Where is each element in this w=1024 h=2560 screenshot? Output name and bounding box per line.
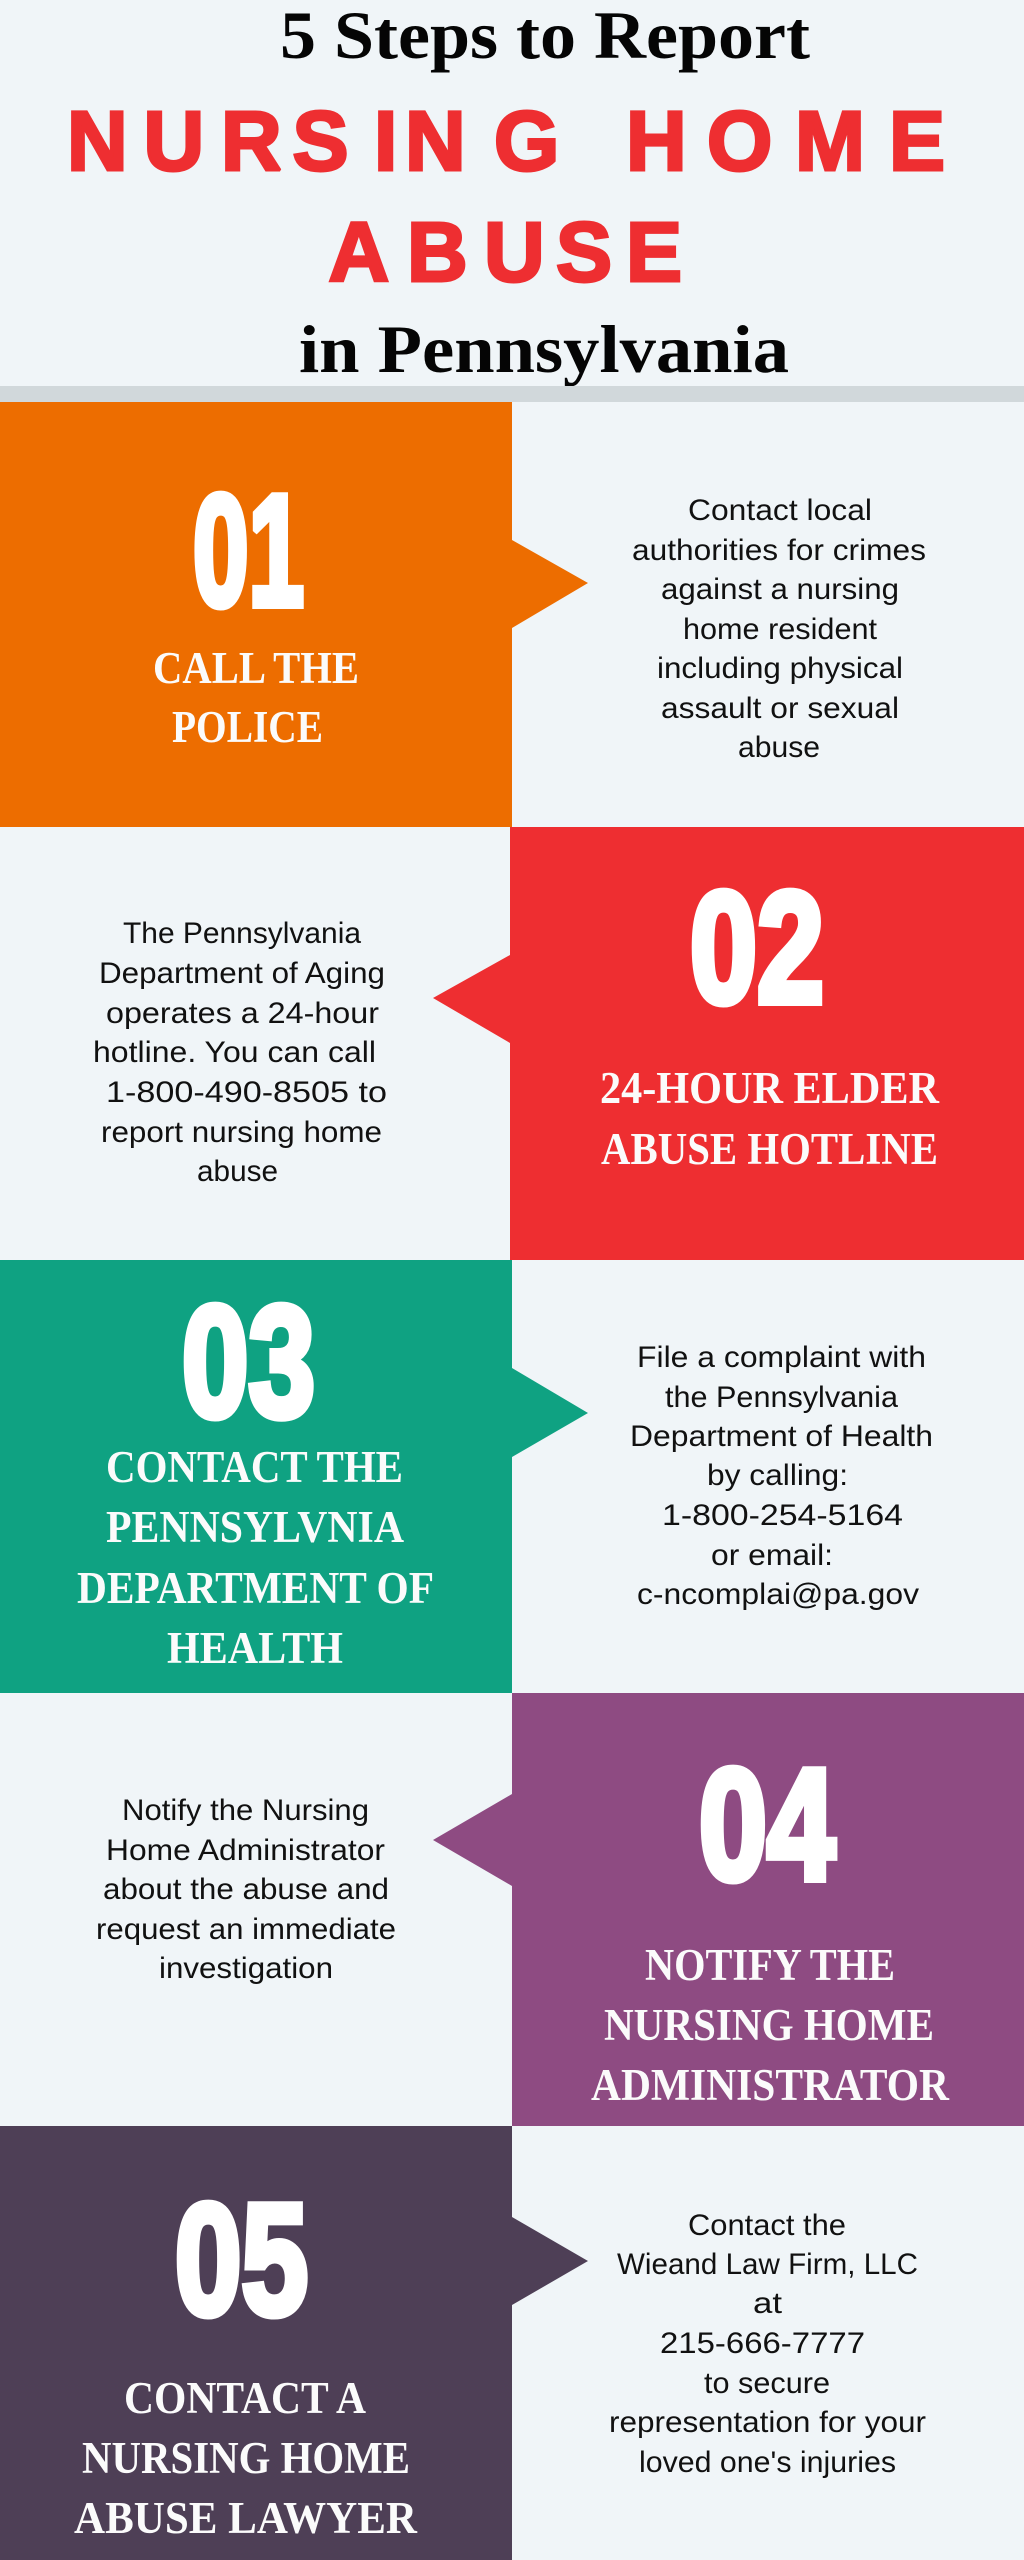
text: step 2 description [93, 917, 387, 1188]
number 04: 04 [699, 1737, 835, 1913]
panel: step 1 call the police [0, 402, 926, 827]
heading: notify the nursing home administrator [591, 1940, 949, 2110]
text: step 3 description: the Pennsylvania [665, 1381, 898, 1414]
text: step 4 description: Home Administrator [106, 1834, 385, 1867]
text: step 2 description: abuse [197, 1155, 278, 1188]
heading: contact the pennsylvania department of health: DEPARTMENT OF [77, 1563, 434, 1613]
heading: contact the pennsylvania department of health: HEALTH [167, 1623, 343, 1673]
text: step 4 description: investigation [159, 1952, 333, 1985]
panel: step 3 department of health [0, 1260, 933, 1693]
heading: contact the pennsylvania department of health [77, 1442, 434, 1673]
panel: step 4 administrator [96, 1693, 1024, 2126]
text: step 5 description: at [753, 2287, 783, 2320]
panel shape with arrow: step 5 [0, 2126, 588, 2560]
text: step 2 description: operates a 24-hour [106, 997, 379, 1030]
heading: notify the nursing home administrator: NURSING HOME [604, 2000, 934, 2050]
text: step 5 description: representation for your [609, 2406, 926, 2439]
panel shape with arrow: step 4 [433, 1693, 1024, 2126]
heading: contact a nursing home abuse lawyer: CONTACT A [124, 2373, 366, 2423]
heading: call the police: CALL THE [153, 643, 359, 693]
heading: 24-hour elder abuse hotline: ABUSE HOTLINE [601, 1124, 938, 1174]
title: NURSING HOME [67, 94, 945, 188]
heading: 24-hour elder abuse hotline: 24-HOUR ELDER [600, 1063, 939, 1113]
text: step 4 description: about the abuse and [103, 1873, 389, 1906]
text: step 2 description: Department of Aging [99, 957, 385, 990]
title: ABUSE [328, 205, 682, 299]
panel: step 2 hotline [93, 827, 1024, 1260]
heading: contact a nursing home abuse lawyer [74, 2373, 417, 2543]
heading: contact the pennsylvania department of health: PENNSYLVNIA [106, 1502, 404, 1552]
panel shape with arrow: step 3 [0, 1260, 588, 1693]
number 01: 01 [193, 463, 304, 639]
heading: contact the pennsylvania department of health: CONTACT THE [106, 1442, 403, 1492]
text: step 5 description: loved one's injuries [639, 2446, 896, 2479]
text: step 2 description: 1-800-490-8505 to [106, 1076, 387, 1109]
heading: notify the nursing home administrator: NOTIFY THE [645, 1940, 895, 1990]
text: step 5 description [609, 2209, 926, 2479]
text: step 3 description [630, 1341, 933, 1611]
heading: contact a nursing home abuse lawyer: NURSING HOME [82, 2433, 410, 2483]
title [67, 0, 945, 387]
text: step 3 description: or email: [711, 1539, 833, 1572]
heading: contact a nursing home abuse lawyer: ABUSE LAWYER [74, 2493, 417, 2543]
text: step 5 description: Wieand Law Firm, LLC [617, 2248, 918, 2281]
text: step 5 description: to secure [704, 2367, 830, 2400]
panel: step 5 lawyer [0, 2126, 926, 2560]
text: step 1 description: home resident [683, 613, 878, 646]
text: step 5 description: Contact the [688, 2209, 846, 2242]
text: step 3 description: by calling: [707, 1459, 848, 1492]
text: step 3 description: c-ncomplai@pa.gov [637, 1578, 919, 1611]
number 05: 05 [175, 2172, 308, 2348]
heading: call the police [153, 643, 359, 752]
text: step 2 description: report nursing home [101, 1116, 382, 1149]
text: step 3 description: Department of Health [630, 1420, 933, 1453]
title: in Pennsylvania [299, 311, 789, 387]
text: step 5 description: 215-666-7777 [660, 2327, 865, 2360]
heading: call the police: POLICE [172, 702, 323, 752]
number 02: 02 [690, 860, 824, 1036]
text: step 1 description [632, 494, 926, 764]
panel shape with arrow: step 1 [0, 402, 588, 827]
panel shape with arrow: step 2 [433, 827, 1024, 1260]
text: step 1 description: including physical [657, 652, 903, 685]
text: step 4 description: request an immediate [96, 1913, 396, 1946]
text: step 1 description: Contact local [688, 494, 872, 527]
text: step 1 description: against a nursing [661, 573, 899, 606]
heading: 24-hour elder abuse hotline [600, 1063, 939, 1174]
text: step 1 description: authorities for crimes [632, 534, 926, 567]
text: step 1 description: abuse [738, 731, 820, 764]
text: step 3 description: 1-800-254-5164 [662, 1499, 903, 1532]
text: step 4 description: Notify the Nursing [122, 1794, 369, 1827]
text: step 2 description: hotline. You can call [93, 1036, 376, 1069]
text: step 4 description [96, 1794, 396, 1985]
text: step 1 description: assault or sexual [661, 692, 899, 725]
heading: notify the nursing home administrator: ADMINISTRATOR [591, 2060, 949, 2110]
text: step 3 description: File a complaint with [637, 1341, 926, 1374]
number 03: 03 [182, 1274, 315, 1450]
text: step 2 description: The Pennsylvania [123, 917, 361, 950]
